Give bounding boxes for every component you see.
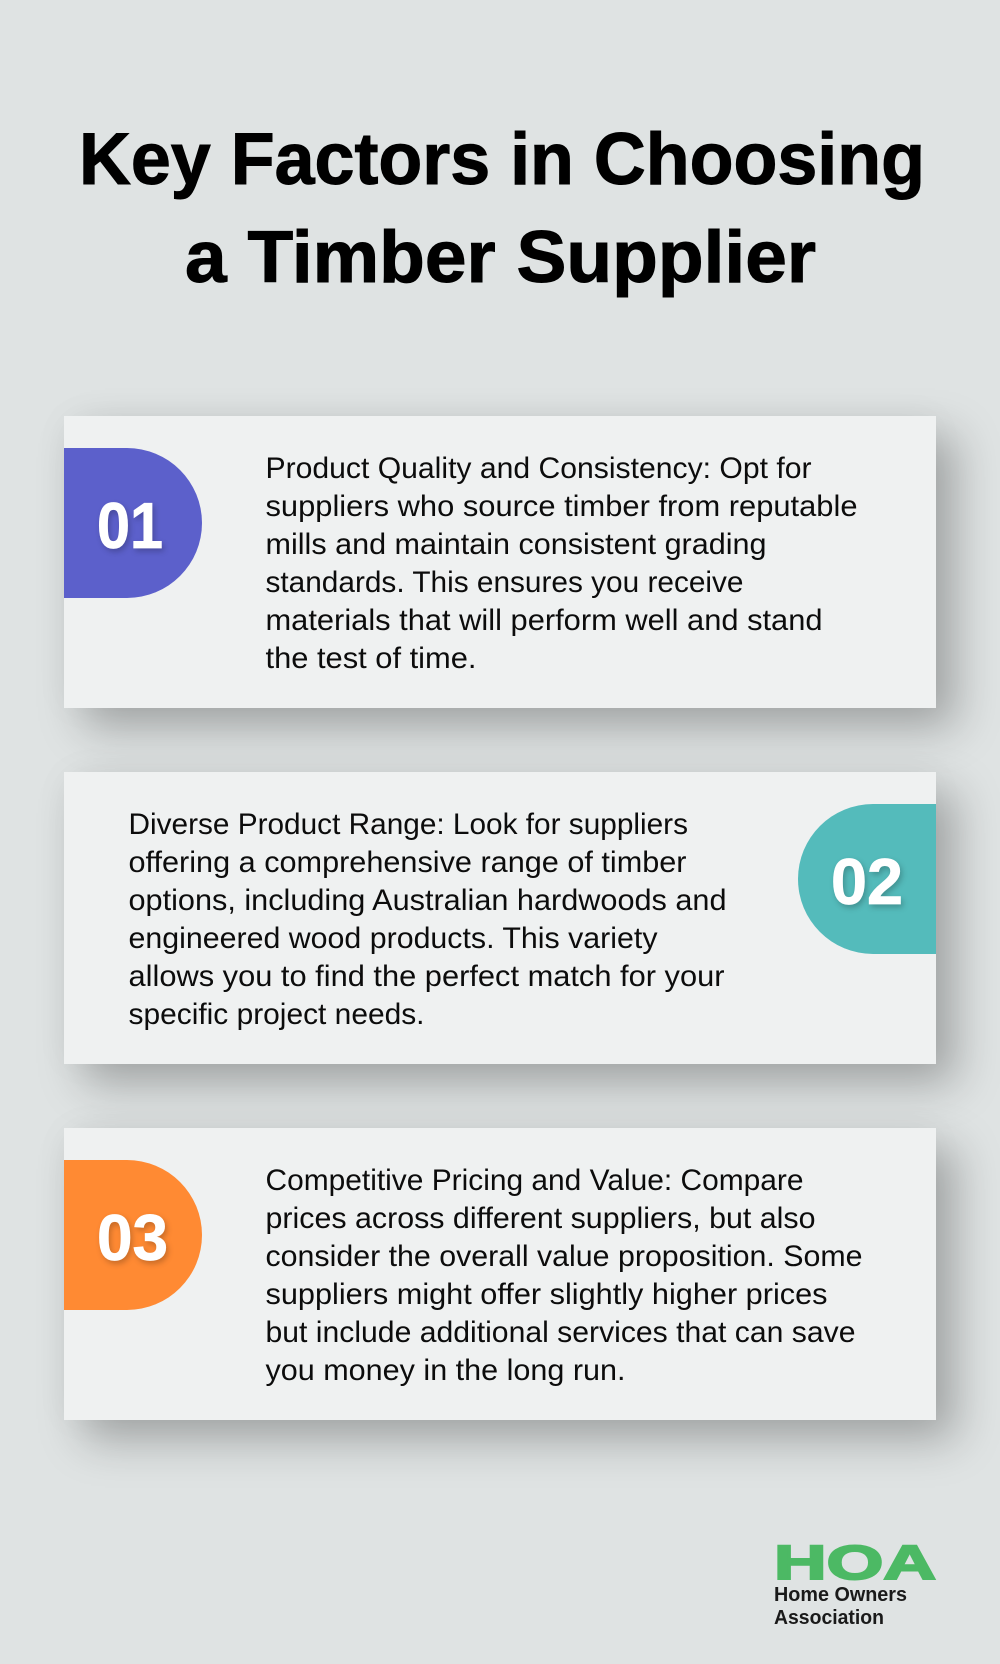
- text: product quality: Product Quality and Consistency: Opt for: [266, 452, 812, 485]
- text: diverse range: Diverse Product Range: Look for suppliers: [128, 808, 688, 841]
- panel: factor 2: [128, 804, 936, 1031]
- title: a Timber Supplier: [185, 217, 816, 298]
- panel: factor 3: [64, 1160, 862, 1387]
- title: [79, 119, 925, 298]
- text: competitive pricing: [266, 1164, 862, 1387]
- badge: 02: 02: [831, 845, 903, 918]
- logo: HOA Home Owners Association: Association: [774, 1607, 884, 1629]
- text: diverse range: specific project needs.: [128, 998, 424, 1031]
- text: diverse range: [128, 808, 726, 1031]
- text: competitive pricing: prices across different suppliers, but also: [266, 1202, 816, 1235]
- text: competitive pricing: but include additional services that can save: [266, 1316, 856, 1349]
- text: competitive pricing: consider the overall value proposition. Some: [266, 1240, 862, 1273]
- logo: HOA Home Owners Association: Home Owners: [774, 1584, 907, 1606]
- logo: HOA Home Owners Association: HOA: [774, 1537, 936, 1590]
- text: product quality: [266, 452, 858, 675]
- text: product quality: materials that will perform well and stand: [266, 604, 822, 637]
- badge: 03: 03: [97, 1201, 168, 1274]
- text: diverse range: options, including Australian hardwoods and: [128, 884, 726, 917]
- text: product quality: mills and maintain consistent grading: [266, 528, 766, 561]
- text: diverse range: engineered wood products. This variety: [128, 922, 658, 955]
- text: diverse range: allows you to find the perfect match for your: [128, 960, 725, 993]
- panel: card 3 background: [64, 1128, 936, 1420]
- text: competitive pricing: you money in the long run.: [266, 1354, 626, 1387]
- text: product quality: the test of time.: [266, 642, 476, 675]
- panel: factor 1: [64, 448, 858, 675]
- panel: card 2 background: [64, 772, 936, 1064]
- badge: 01: [64, 448, 202, 598]
- badge: 02: [798, 804, 936, 954]
- text: product quality: suppliers who source timber from reputable: [266, 490, 858, 523]
- panel: card 1 background: [64, 416, 936, 708]
- text: product quality: standards. This ensures you receive: [266, 566, 744, 599]
- logo: HOA Home Owners Association: [774, 1537, 936, 1629]
- title: Key Factors in Choosing: [79, 119, 925, 200]
- text: competitive pricing: suppliers might offer slightly higher prices: [266, 1278, 828, 1311]
- badge: 03: [64, 1160, 202, 1310]
- text: diverse range: offering a comprehensive range of timber: [128, 846, 687, 879]
- text: competitive pricing: Competitive Pricing and Value: Compare: [266, 1164, 804, 1197]
- badge: 01: 01: [97, 489, 163, 562]
